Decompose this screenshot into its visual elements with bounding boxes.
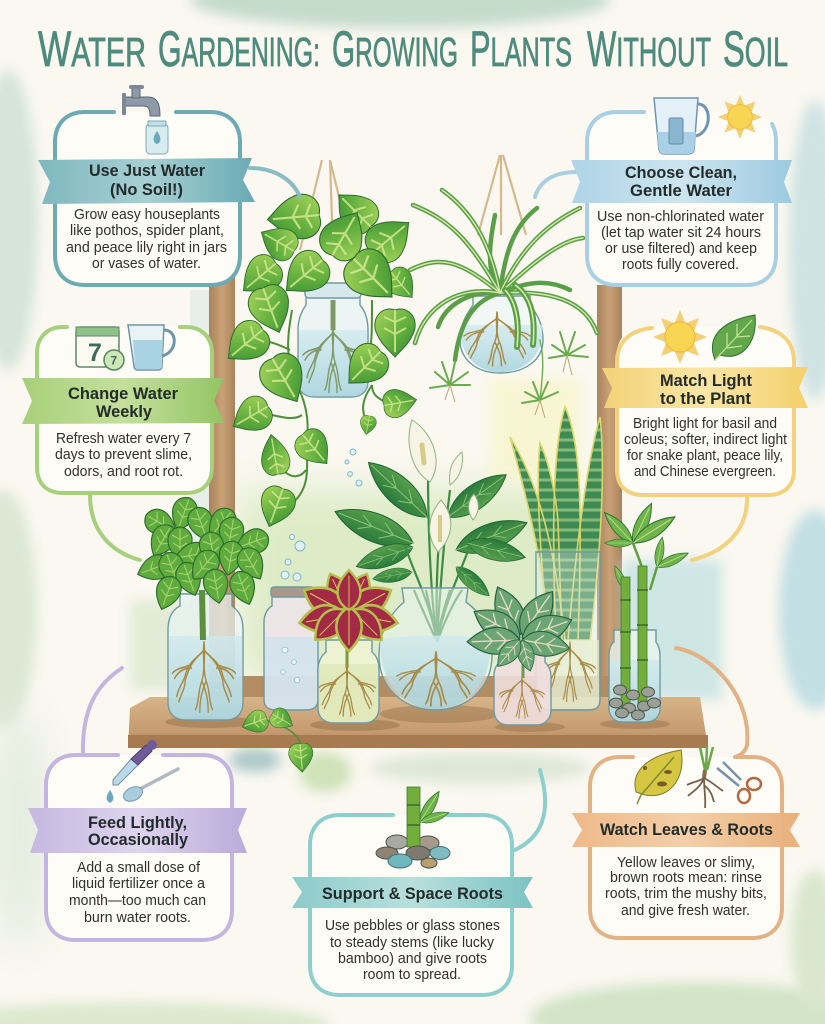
icon: calendar: 7 — [110, 354, 118, 368]
text: roots fully covered. — [622, 257, 739, 273]
panel: watch leaves and roots — [572, 648, 800, 938]
icon: bamboo and pebbles — [376, 787, 450, 868]
plant: peace lily in bowl vase — [330, 420, 532, 710]
ribbon — [38, 158, 255, 204]
shelf — [128, 697, 708, 748]
heading — [89, 161, 205, 199]
text — [66, 207, 227, 272]
icon: faucet — [122, 85, 160, 116]
connector — [692, 497, 747, 560]
tall vase — [536, 552, 600, 710]
text — [69, 860, 206, 926]
fallen pothos sprig — [238, 705, 314, 773]
plant: snake plant in tall vase — [505, 407, 610, 710]
heading: Use Just Water — [89, 161, 205, 180]
heading: Occasionally — [88, 830, 189, 849]
spiderettes — [430, 332, 588, 403]
title: WATER — [38, 21, 146, 77]
jar pebbles — [610, 685, 660, 720]
window scene — [128, 275, 722, 748]
basil jar — [168, 590, 243, 720]
icon: water jar — [146, 121, 168, 154]
panel: use just water — [38, 85, 300, 285]
bamboo leaves — [600, 501, 690, 592]
text — [605, 855, 767, 919]
heading — [68, 384, 178, 421]
text: Bright light for basil and — [633, 416, 777, 432]
pink water jar — [264, 587, 318, 710]
window pane wash — [240, 380, 580, 680]
icon: sun — [653, 310, 707, 364]
connector — [515, 770, 545, 850]
text: and peace lily right in jars — [66, 240, 227, 256]
text: for snake plant, peace lily, — [627, 448, 783, 464]
text: Add a small dose of — [77, 860, 201, 876]
icon: sun — [718, 95, 762, 139]
text: roots, trim the mushy bits, — [605, 886, 767, 902]
heading: Weekly — [96, 402, 153, 421]
text: coleus; softer, indirect light — [624, 432, 787, 448]
heading: (No Soil!) — [110, 180, 183, 199]
text — [325, 918, 500, 983]
window recess strip — [190, 290, 209, 680]
connector — [83, 668, 122, 753]
ribbon — [292, 877, 533, 908]
text: Yellow leaves or slimy, — [617, 855, 755, 871]
heading: Choose Clean, — [625, 163, 737, 182]
plant: basil in jar — [134, 494, 272, 720]
icon: calendar — [76, 327, 124, 370]
connector — [535, 172, 577, 197]
text — [624, 416, 787, 480]
text: brown roots mean: rinse — [610, 870, 762, 886]
text: room to spread. — [363, 967, 461, 983]
pane tint outside the frame — [130, 560, 722, 700]
connector — [676, 648, 747, 756]
title: GARDENING: — [158, 21, 320, 77]
ribbon — [22, 378, 224, 424]
bamboo jar — [609, 630, 660, 722]
heading — [88, 813, 189, 849]
panel: change water weekly — [22, 325, 224, 560]
icon: spoon — [121, 769, 178, 804]
lily leaves — [330, 453, 532, 601]
text: month—too much can — [69, 893, 206, 909]
plant: lucky bamboo in jar — [600, 501, 690, 722]
icon: calendar: 7 — [88, 339, 102, 367]
text — [55, 431, 192, 480]
icon: measuring cup — [128, 325, 174, 370]
title — [38, 21, 788, 77]
text: like pothos, spider plant, — [70, 223, 224, 239]
text: and Chinese evergreen. — [634, 464, 776, 480]
ribbon — [28, 808, 247, 853]
window frame bottom — [209, 676, 622, 698]
front drooping leaves — [505, 285, 534, 347]
text — [597, 209, 764, 273]
bowl vase — [379, 588, 492, 710]
title: WITHOUT — [587, 21, 711, 77]
heading: Gentle Water — [630, 181, 732, 200]
text: Refresh water every 7 — [56, 431, 191, 447]
vines — [262, 300, 385, 505]
icon: yellow leaf — [635, 750, 682, 804]
title: PLANTS — [470, 21, 572, 77]
heading: Feed Lightly, — [88, 813, 187, 832]
icon: leaf — [712, 315, 755, 360]
text: or use filtered) and keep — [605, 241, 757, 257]
panel: choose clean water — [535, 95, 792, 285]
text: burn water roots. — [84, 910, 191, 926]
pink jar — [494, 650, 551, 725]
heading: to the Plant — [660, 389, 751, 408]
text: to steady stems (like lucky — [330, 935, 495, 951]
bands — [514, 418, 602, 632]
text: Grow easy houseplants — [74, 207, 220, 223]
panel: match light to the plant — [602, 310, 808, 560]
plant: spider plant in hanging jar — [410, 190, 597, 418]
ribbon — [571, 160, 792, 203]
ribbon — [572, 813, 800, 847]
text: and give fresh water. — [621, 903, 750, 919]
plant: pothos in hanging jar — [216, 181, 423, 532]
hanging cords — [300, 155, 526, 250]
title: SOIL — [723, 21, 788, 77]
heading — [660, 371, 752, 408]
window frame left — [209, 275, 235, 690]
peace lily spathes — [409, 420, 478, 552]
spider jar — [460, 296, 543, 373]
heading: Support & Space Roots — [322, 884, 503, 903]
text: or vases of water. — [92, 256, 201, 272]
text: Use non-chlorinated water — [597, 209, 764, 225]
bamboo stems — [620, 566, 648, 707]
heading: Change Water — [68, 384, 178, 403]
text: days to prevent slime, — [55, 447, 192, 463]
heading: Match Light — [660, 371, 752, 390]
lily stems — [405, 470, 470, 642]
heading — [625, 163, 737, 200]
plant: coleus in jar — [297, 569, 400, 723]
panel: support and space roots — [292, 770, 545, 995]
bubbles — [281, 449, 362, 581]
title: GROWING — [332, 21, 458, 77]
icon: dropper — [107, 740, 157, 803]
text: bamboo) and give roots — [338, 951, 487, 967]
connector — [90, 495, 140, 560]
icon: root trimming — [687, 746, 723, 808]
plant: aglaonema in pink jar — [467, 581, 576, 725]
hanging jar — [298, 283, 368, 397]
panel: feed lightly — [28, 668, 247, 940]
spider leaves — [410, 190, 597, 360]
connector — [250, 168, 300, 197]
icon: filter pitcher — [654, 98, 708, 154]
ribbon — [602, 367, 808, 408]
coleus jar — [318, 640, 379, 723]
icon: scissors — [717, 762, 761, 803]
heading: Watch Leaves & Roots — [600, 820, 773, 839]
window frame right — [597, 285, 622, 690]
text: liquid fertilizer once a — [72, 876, 206, 892]
text: Use pebbles or glass stones — [325, 918, 500, 934]
text: odors, and root rot. — [64, 464, 183, 480]
text: (let tap water sit 24 hours — [601, 225, 761, 241]
